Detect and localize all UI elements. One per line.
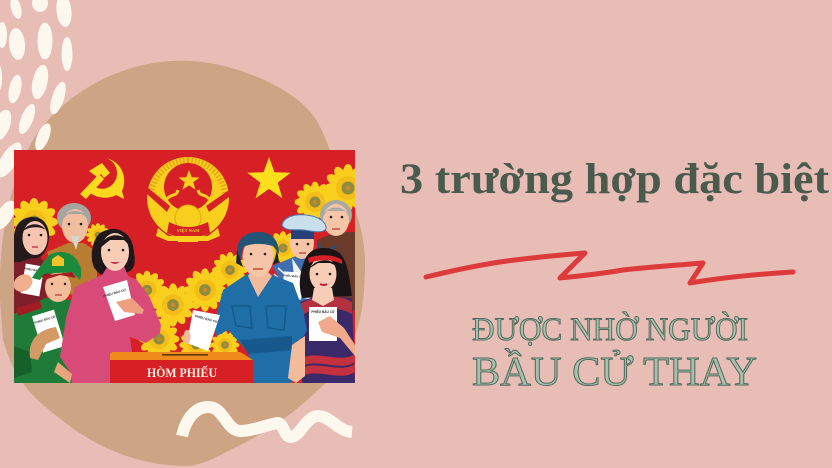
person: soldier: PHIẾU BẦU CỬ	[34, 313, 57, 325]
decorative cream dashes	[0, 0, 73, 233]
person: girl with red headband	[300, 248, 355, 383]
person: woman in pink ao dai: PHIẾU BẦU CỬ	[103, 287, 127, 298]
illustration: election poster	[10, 150, 372, 383]
subtitle line 1: ĐƯỢC NHỜ NGƯỜI	[472, 310, 748, 348]
person: left woman with ballot	[14, 217, 50, 314]
subtitle line 2: BẦU CỬ THAY	[472, 348, 757, 394]
person: woman in pink ao dai	[54, 229, 161, 383]
title: 3 trường hợp đặc biệt	[400, 156, 830, 203]
icon: yellow star	[247, 157, 291, 198]
person: old man	[47, 203, 97, 302]
person: soldier	[14, 252, 84, 383]
person: sailor: PHIẾU BẦU CỬ	[283, 272, 304, 279]
icon: national emblem: VIỆT NAM	[177, 228, 200, 233]
subtitle	[472, 310, 757, 394]
icon: hammer and sickle	[80, 158, 124, 199]
person: worker in blue: PHIẾU BẦU CỬ	[194, 313, 219, 324]
ballot box: HÒM PHIẾU	[147, 365, 217, 380]
sunflowers	[14, 164, 355, 352]
red zigzag divider	[426, 253, 793, 283]
person: old woman in brown	[317, 200, 355, 310]
person: girl with red headband: PHIẾU BẦU CỬ	[311, 309, 335, 314]
person: left woman with ballot: PHIẾU BẦU CỬ	[24, 265, 46, 274]
person: sailor	[272, 215, 336, 312]
ballot box	[110, 352, 253, 383]
icon: national emblem	[147, 157, 229, 242]
person: worker in blue	[184, 232, 307, 383]
white wave squiggle	[182, 407, 352, 437]
poster red background	[14, 150, 355, 383]
tan blob shape	[0, 61, 365, 466]
